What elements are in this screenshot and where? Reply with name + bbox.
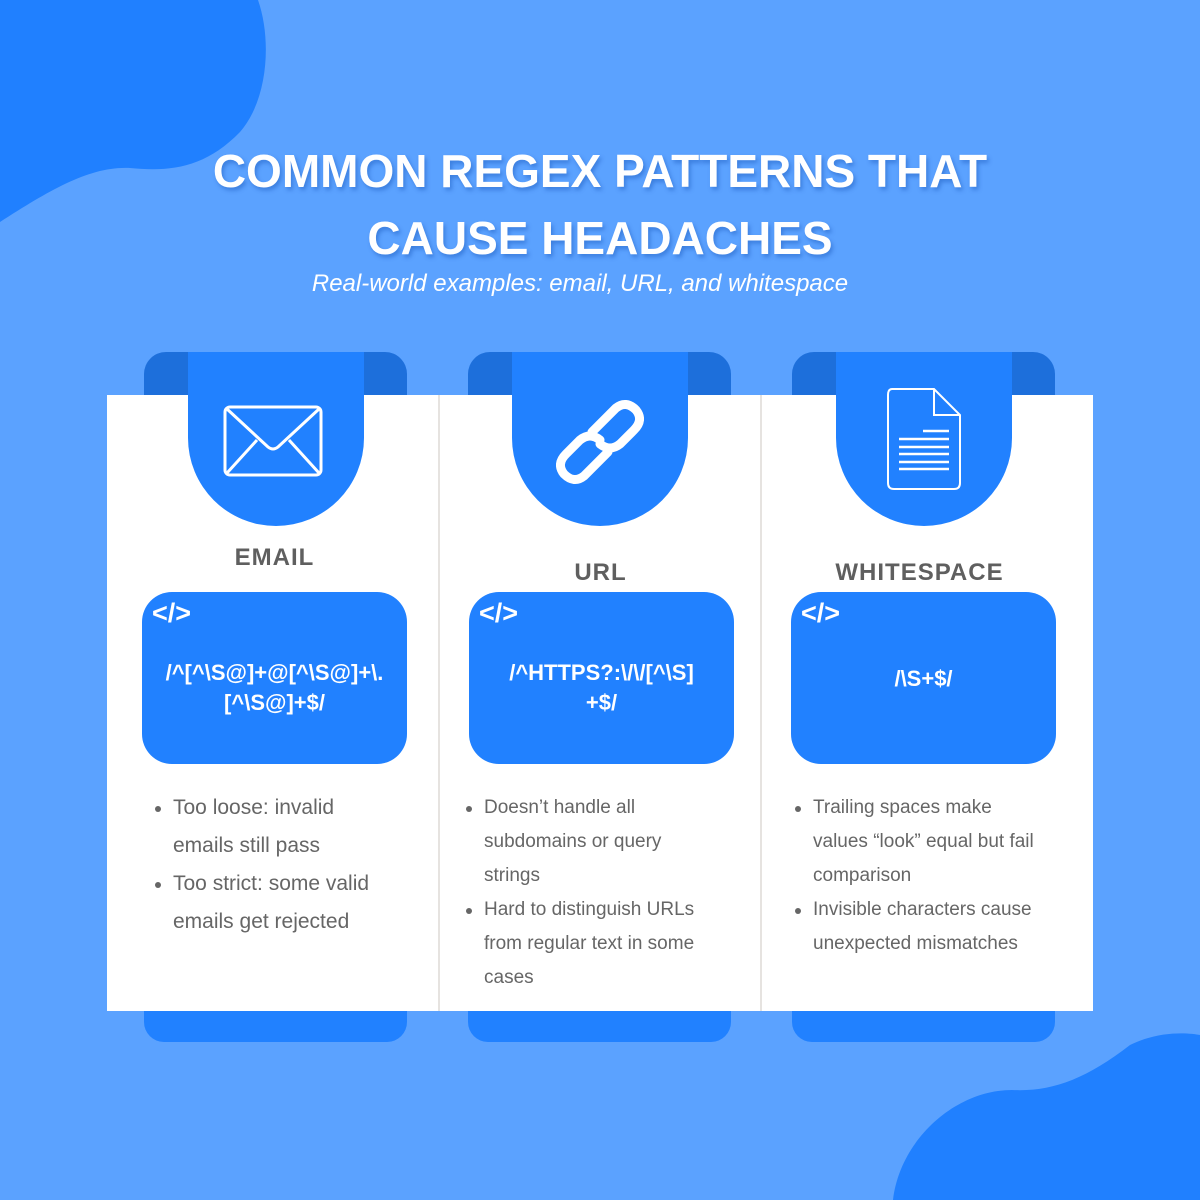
bullet list: Invisible characters cause unexpected mismatches — [813, 899, 1032, 954]
code box: </> — [152, 598, 191, 628]
bullet list: Doesn’t handle all subdomains or query strings — [484, 797, 661, 886]
code box: [^\S@]+$/ — [224, 690, 325, 715]
code box — [791, 592, 1056, 764]
icon: document badge — [836, 352, 1012, 526]
code box: +$/ — [586, 690, 617, 715]
heading: URL — [574, 559, 627, 586]
title: COMMON REGEX PATTERNS THAT — [213, 145, 987, 197]
title — [213, 145, 990, 264]
code box: /\S+$/ — [894, 666, 953, 691]
heading: EMAIL — [235, 544, 314, 571]
panel: email — [142, 352, 407, 933]
subtitle: Real-world examples: email, URL, and whitespace — [312, 270, 848, 297]
tabs behind cards — [144, 352, 407, 412]
code box: /^[^\S@]+@[^\S@]+\. — [166, 660, 383, 685]
code box: </> — [479, 598, 518, 628]
code box — [142, 592, 407, 764]
code box: /^HTTPS?:\/\/[^\S] — [509, 660, 694, 685]
heading: WHITESPACE — [835, 559, 1004, 586]
icon: envelope badge — [188, 352, 364, 526]
code box — [469, 592, 734, 764]
panel: whitespace — [791, 352, 1056, 954]
panel: cards background — [107, 395, 1093, 1011]
code box: </> — [801, 598, 840, 628]
bullet list — [155, 796, 369, 933]
panel: url — [466, 352, 734, 988]
bullet list: Too strict: some valid emails get rejected — [173, 872, 369, 933]
bullet list — [795, 797, 1034, 954]
bullet list: Too loose: invalid emails still pass — [173, 796, 334, 857]
icon: link badge — [512, 352, 688, 526]
title: CAUSE HEADACHES — [367, 212, 833, 264]
bullet list: Trailing spaces make values “look” equal but fail comparison — [813, 797, 1034, 886]
bullet list — [466, 797, 694, 988]
bullet list: Hard to distinguish URLs from regular text in some cases — [484, 899, 694, 988]
